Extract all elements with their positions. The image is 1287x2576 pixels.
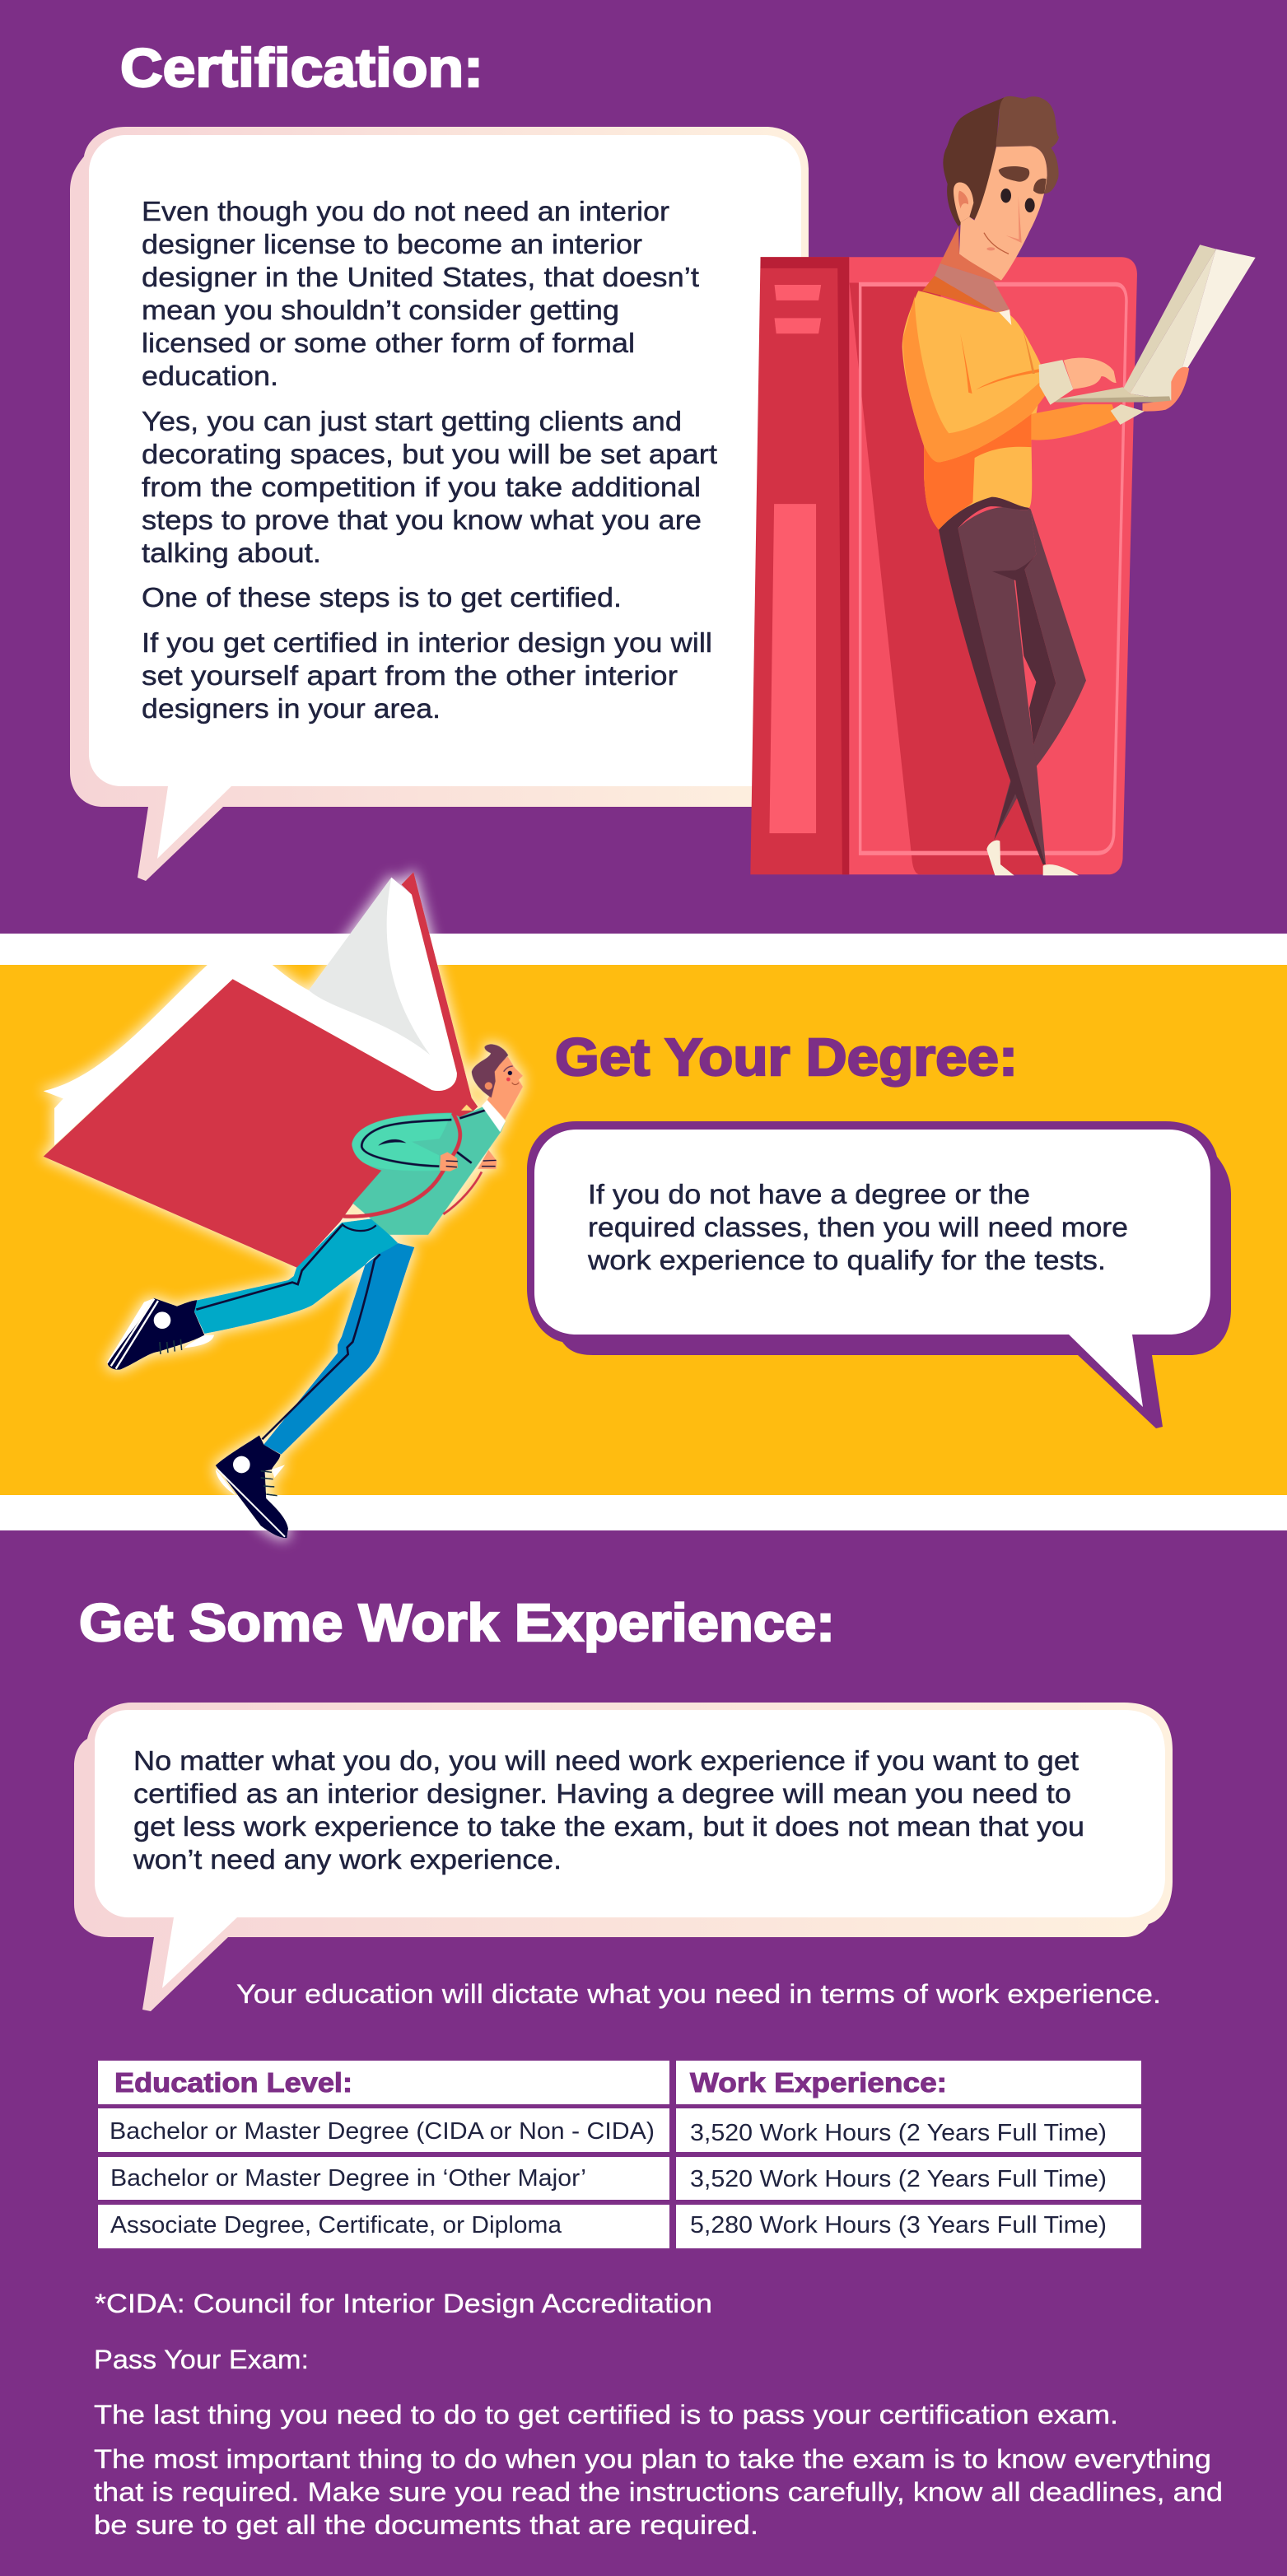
table: education and work experience: 3,520 Work Hours (2 Years Full Time) [690,2166,1107,2192]
text block: exam body: The most important thing to do when you plan to take the exam is to know everything [94,2444,1211,2474]
table: education and work experience: Associate Degree, Certificate, or Diploma [110,2212,562,2238]
text block: degree body [587,1180,1128,1276]
text block: exam body [94,2400,1223,2540]
panel: get some work experience [0,1530,1287,2576]
text block: exam body: be sure to get all the documents that are required. [94,2510,758,2540]
text block: work experience body: won’t need any work experience. [133,1845,562,1875]
illustration: red book [750,257,1137,874]
jacket and arms [343,1044,523,1235]
head [922,96,1059,325]
panel: get your degree [0,872,1287,1538]
text block: certification body: talking about. [142,538,321,569]
heading: Certification: Certification: [120,37,483,98]
speech bubble: certification [70,127,809,881]
speech bubble: work experience [74,1703,1173,2011]
text block: certification body [142,197,718,724]
text block: certification body: licensed or some other form of formal [142,328,635,359]
text block: degree body: work experience to qualify for the tests. [587,1246,1106,1276]
text block: work experience body: certified as an interior designer. Having a degree will mean you need to [133,1779,1071,1810]
text: Pass Your Exam: Pass Your Exam: [94,2345,309,2374]
red book [44,872,478,1268]
table: education and work experience: Education Level: [114,2067,352,2098]
hands and cuffs [1039,358,1189,425]
head [472,1044,523,1120]
text block: certification body: designer license to become an interior [142,230,642,260]
text block: certification body: steps to prove that you know what you are [142,505,702,536]
text block: certification body: set yourself apart from the other interior [142,661,678,692]
text block: certification body: designers in your area. [142,694,441,724]
text block: certification body: designer in the United States, that doesn’t [142,263,700,293]
legs [194,1218,414,1455]
heading: Get Some Work Experience: Get Some Work Experience: [79,1593,835,1652]
table: education and work experience: 5,280 Work Hours (3 Years Full Time) [690,2212,1107,2238]
text block: work experience body [133,1746,1084,1875]
sweater [902,291,1117,529]
text block: exam body: that is required. Make sure you read the instructions carefully, know all deadlines, and [94,2477,1223,2507]
footnote: CIDA: *CIDA: Council for Interior Design Accreditation [95,2289,712,2318]
table: education and work experience: Bachelor or Master Degree (CIDA or Non - CIDA) [110,2118,655,2145]
text block: certification body: One of these steps is to get certified. [142,583,622,613]
speech bubble: degree [527,1121,1231,1428]
text block: work experience body: No matter what you do, you will need work experience if you want to get [133,1746,1079,1777]
heading: Get Your Degree: Get Your Degree: [555,1027,1018,1087]
table: education and work experience: Bachelor or Master Degree in ‘Other Major’ [110,2165,586,2192]
table: education and work experience: Work Experience: [690,2067,947,2098]
text block: degree body: If you do not have a degree or the [588,1180,1030,1210]
illustration: man carrying giant book [44,872,523,1538]
text block: exam body: The last thing you need to do to get certified is to pass your certification exam. [94,2400,1118,2429]
sneakers [107,1298,288,1538]
text block: certification body: If you get certified in interior design you will [142,628,712,659]
panel: certification [0,0,1287,939]
text block: work experience body: get less work experience to take the exam, but it does not mean that you [133,1812,1084,1842]
table: education and work experience: 3,520 Work Hours (2 Years Full Time) [690,2120,1107,2146]
text: education note: Your education will dictate what you need in terms of work experience. [236,1979,1161,2009]
trousers [939,496,1086,875]
text block: certification body: decorating spaces, but you will be set apart [142,440,718,470]
icon: laptop [1123,245,1256,401]
text block: certification body: from the competition if you take additional [142,473,701,503]
text block: certification body: Yes, you can just start getting clients and [142,407,682,437]
text block: degree body: required classes, then you will need more [588,1213,1128,1243]
text block: certification body: Even though you do not need an interior [142,197,669,227]
table: education and work experience [98,2061,1141,2248]
text block: certification body: education. [142,361,278,392]
illustration: man with laptop [902,96,1256,875]
text block: certification body: mean you shouldn’t consider getting [142,296,619,326]
